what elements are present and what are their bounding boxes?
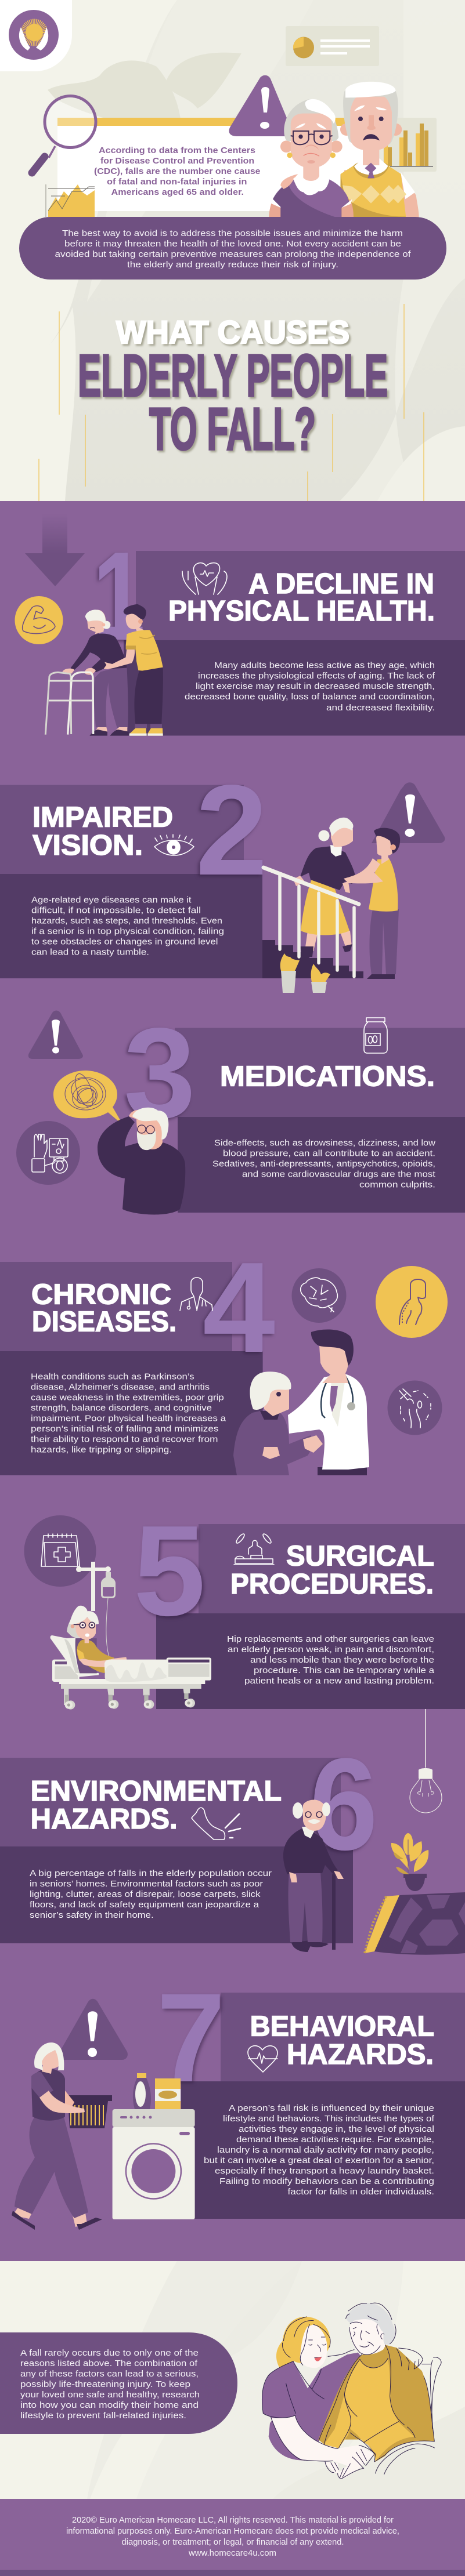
footer: informational purposes only. Euro-American Homecare does not provide medical advice, — [66, 2527, 399, 2536]
panel: closing background — [0, 2261, 465, 2499]
body text: difficult, if not impossible, to detect fall — [31, 906, 201, 915]
heading: ENVIRONMENTAL — [31, 1776, 282, 1807]
body text: if a senior is in top physical condition, failing — [31, 927, 224, 936]
body text: hazards, like tripping or slipping. — [31, 1445, 172, 1454]
heading: PROCEDURES. — [230, 1569, 434, 1600]
body text: Many adults become less active as they age, which — [214, 661, 435, 670]
chart card: bars — [383, 118, 437, 172]
panel: section 1 physical health — [15, 526, 465, 736]
line chart — [46, 184, 95, 217]
icon: warning triangle — [28, 1010, 83, 1059]
number 1: 1 — [93, 526, 145, 667]
footer: 2020© Euro American Homecare LLC, All rights reserved. This material is provided for — [72, 2516, 394, 2525]
body text: A person’s fall risk is influenced by their unique — [229, 2104, 434, 2113]
body text: in seniors’ homes. Environmental factors such as poor — [30, 1880, 263, 1889]
heading: A DECLINE IN — [248, 568, 434, 600]
body text: and less mobile than they were before the — [250, 1656, 434, 1665]
body text — [212, 1139, 436, 1190]
body text: procedure. This can be temporary while a — [254, 1666, 435, 1675]
heading: HAZARDS. — [31, 1804, 178, 1835]
panel: section 6 environmental hazards — [0, 1709, 465, 1955]
heading: SURGICAL — [286, 1541, 434, 1572]
arrow — [25, 514, 85, 586]
intro text: of fatal and non-fatal injuries in — [107, 177, 247, 187]
body text: patient heals or a new and lasting problem. — [244, 1677, 434, 1686]
body text: and decreased flexibility. — [326, 703, 435, 713]
body text — [30, 1869, 272, 1920]
callout: best way pill: the elderly and greatly reduce their risk of injury. — [127, 260, 338, 270]
heading — [250, 2011, 434, 2070]
icon: heart in hands — [182, 563, 227, 594]
heading — [168, 568, 435, 627]
callout: closing pill: A fall rarely occurs due to only one of the — [20, 2348, 199, 2358]
body text: lifestyle and behaviors. This includes the types of — [223, 2114, 435, 2124]
panel: section 7 behavioral hazards — [12, 1968, 465, 2230]
body text: Side-effects, such as drowsiness, dizziness, and low — [214, 1139, 436, 1148]
body text: hazards, such as steps, and thresholds. Even — [31, 916, 222, 926]
intro text: Americans aged 65 and older. — [111, 187, 244, 197]
chart card: pie — [286, 26, 379, 66]
icon: patterned carpet — [365, 1892, 465, 1955]
body text: an elderly person weak, in pain and discomfort, — [228, 1645, 434, 1655]
body text: can lead to a nasty tumble. — [31, 948, 149, 957]
callout: best way pill — [19, 217, 446, 280]
callout: best way pill: avoided but taking certain preventive measures can prolong the independence of — [55, 249, 411, 259]
icon: blood pressure monitor — [16, 1121, 80, 1185]
body text: Failing to modify behaviors can be a contributing — [219, 2177, 434, 2186]
panel: purple main background — [0, 501, 465, 2261]
panel: section 5 surgical procedures — [24, 1499, 465, 1710]
body text: cause weakness in the extremities, poor grip — [31, 1393, 224, 1402]
body text: laundry is a normal daily activity for many people, — [217, 2146, 434, 2155]
body text: blood pressure, can all contribute to an accident. — [223, 1149, 435, 1159]
intro text: (CDC), falls are the number one cause — [94, 166, 260, 176]
body text — [31, 895, 224, 957]
icon: warning triangle — [372, 782, 445, 843]
illustration: woman with laundry basket — [12, 2042, 112, 2230]
number 7: 7 — [157, 1968, 225, 2109]
icon: calendar with cross — [24, 1515, 96, 1587]
body text — [31, 1372, 226, 1454]
falling yellow lines — [39, 304, 424, 501]
title: WHAT CAUSES — [116, 314, 349, 350]
icon: knee joint — [388, 1380, 442, 1435]
icon: slipping shoe — [192, 1808, 240, 1840]
body text: especially if they transport a heavy laundry basket. — [215, 2167, 434, 2176]
icon: IV stand — [76, 1562, 116, 1657]
icon: spine posture — [376, 1266, 448, 1338]
panel: cream header background — [0, 0, 465, 501]
icon: brain — [291, 1268, 346, 1323]
heading: BEHAVIORAL — [250, 2011, 434, 2042]
body text: lighting, clutter, areas of disrepair, loose carpets, slick — [30, 1890, 261, 1899]
icon: warning triangle — [229, 75, 292, 136]
icon: warning triangle — [55, 1999, 128, 2060]
number 4: 4 — [203, 1236, 275, 1380]
body text: Hip replacements and other surgeries can leave — [227, 1635, 434, 1644]
icon: eye — [154, 835, 194, 855]
callout: closing pill: reasons listed above. The combination of — [20, 2359, 198, 2368]
logo — [0, 0, 72, 71]
body text: light exercise may result in decreased muscle strength, — [196, 682, 435, 691]
number 5: 5 — [134, 1499, 206, 1643]
body text: Age-related eye diseases can make it — [31, 895, 192, 905]
body text: disease, Alzheimer’s disease, and arthritis — [31, 1383, 210, 1392]
illustration: woman on stairs — [262, 818, 400, 993]
body text: but it can involve a great deal of exertion for a senior, — [204, 2156, 434, 2165]
heading: HAZARDS. — [287, 2039, 434, 2070]
number 6: 6 — [309, 1730, 378, 1877]
body text: senior’s safety in their home. — [30, 1911, 154, 1920]
body text: Health conditions such as Parkinson’s — [31, 1372, 194, 1381]
callout: best way pill: The best way to avoid is to address the possible issues and minimize the harm — [62, 228, 403, 238]
callout: best way pill: before it may threaten the health of the loved one. Not every accident can be — [64, 239, 401, 249]
body text — [227, 1635, 435, 1686]
icon: detergent bottle and box — [133, 2073, 181, 2109]
illustration: confused man — [98, 1108, 185, 1214]
body text: activities they engage in, the level of physical — [239, 2125, 434, 2134]
heading: PHYSICAL HEALTH. — [168, 596, 435, 627]
intro text: According to data from the Centers — [99, 146, 255, 155]
intro text: for Disease Control and Prevention — [100, 156, 254, 166]
body text: person’s initial risk of falling and minimizes — [31, 1424, 218, 1434]
icon: doctor — [180, 1278, 212, 1311]
icon: pill bottle — [364, 1018, 387, 1053]
callout: closing pill: your loved one safe and healthy, research — [20, 2390, 200, 2400]
body text: their ability to respond to and recover from — [31, 1435, 218, 1444]
body text: demand these activities require. For example, — [236, 2135, 434, 2145]
number 3: 3 — [124, 1002, 196, 1145]
number 2: 2 — [196, 759, 268, 902]
icon: washing machine — [113, 2109, 195, 2219]
callout: closing pill: possibly life-threatening injury. To keep — [20, 2379, 190, 2389]
body text: common culprits. — [359, 1181, 435, 1190]
illustration: old man with cane — [283, 1799, 344, 1952]
icon: potted plant — [391, 1833, 428, 1891]
heading — [31, 1776, 282, 1835]
map background — [48, 53, 241, 124]
title — [78, 314, 388, 462]
body text: floors, and lack of safety equipment can jeopardize a — [30, 1900, 259, 1910]
heading — [230, 1541, 434, 1600]
panel: section 3 medications — [16, 1002, 465, 1214]
heading — [31, 1279, 176, 1338]
icon: speech bubble scribble — [53, 1071, 123, 1125]
heading: VISION. — [33, 830, 143, 861]
illustration: elderly couple — [269, 82, 419, 217]
panel: intro statistic — [32, 75, 365, 217]
body text: A big percentage of falls in the elderly population occur — [30, 1869, 272, 1878]
callout: closing pill: any of these factors can lead to a serious, — [20, 2369, 199, 2379]
body text: increases the physiological effects of aging. The lack of — [198, 672, 435, 681]
body text: Sedatives, anti-depressants, antipsychotics, opioids, — [212, 1160, 435, 1169]
heading: MEDICATIONS. — [220, 1061, 435, 1093]
callout: closing pill — [0, 2332, 237, 2434]
heading: DISEASES. — [32, 1307, 176, 1338]
icon: surgery — [234, 1533, 274, 1565]
panel: section 2 impaired vision — [0, 759, 445, 993]
body text — [185, 661, 435, 713]
title: TO FALL? — [149, 396, 316, 462]
footer: diagnosis, or treatment; or legal, or financial of any extend. — [122, 2538, 344, 2547]
man — [340, 82, 419, 217]
illustration: caregiver hugging senior — [262, 2303, 441, 2479]
illustration: doctor and patient — [233, 1329, 369, 1475]
illustration: caregiver and woman with walker — [45, 604, 163, 736]
body text: and some cardiovascular drugs are the most — [242, 1170, 435, 1180]
body text: impairment. Poor physical health increases a — [31, 1414, 226, 1423]
body text: strength, balance disorders, and cognitive — [31, 1403, 212, 1413]
heading: CHRONIC — [31, 1279, 171, 1310]
illustration: patient in hospital bed — [51, 1606, 211, 1710]
body text: to see obstacles or changes in ground level — [31, 937, 218, 946]
footer: www.homecare4u.com — [188, 2549, 276, 2558]
woman — [269, 99, 354, 217]
icon: magnifying glass — [32, 96, 96, 173]
panel: section 4 chronic diseases — [0, 1236, 448, 1475]
footer — [0, 2499, 465, 2576]
body text: decreased bone quality, loss of balance and coordination, — [185, 692, 435, 702]
callout: closing pill: lifestyle to prevent fall-related injuries. — [20, 2411, 186, 2421]
heading: IMPAIRED — [33, 802, 173, 833]
heading — [33, 802, 173, 861]
icon: heartbeat heart — [248, 2046, 277, 2072]
body text — [204, 2104, 435, 2197]
icon: muscle arm — [15, 596, 63, 644]
body text: factor for falls in older individuals. — [288, 2187, 434, 2197]
icon: hanging light bulb — [410, 1709, 442, 1813]
intro text — [94, 146, 260, 197]
callout: closing pill: into how you can modify their home and — [20, 2400, 199, 2410]
